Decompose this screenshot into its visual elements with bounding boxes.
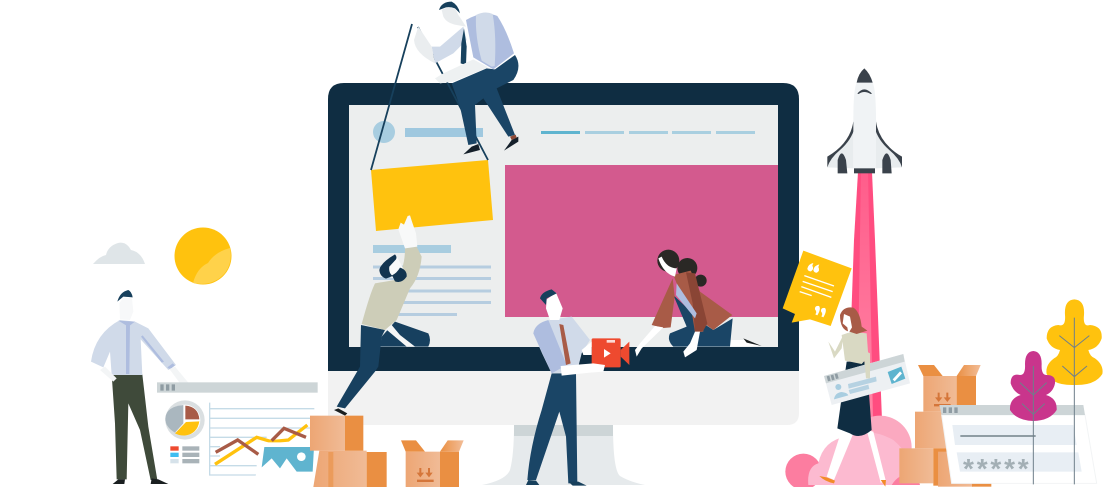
monitor [328,83,799,436]
skirt [837,362,872,436]
hands [100,367,188,383]
lower box [313,451,387,487]
cloud [93,243,145,264]
engine base [854,168,875,173]
upper hand [582,342,592,355]
blouse [842,332,868,364]
opening quote mark [807,263,819,273]
magenta tree [1010,351,1057,484]
man on left with shirt and trousers [91,290,188,484]
shirt shadow [533,320,567,373]
shirt detail [118,321,175,374]
shoes [463,137,518,154]
raised arm and fingers [398,215,417,248]
forearm [435,59,488,83]
website title bar [405,128,483,137]
yellow hanging sign with ropes [371,24,493,231]
jacket shadow [686,272,707,332]
arm over card [864,355,870,378]
stand shadow [514,425,613,436]
right arm [864,350,870,377]
pink clouds [785,416,920,487]
monitor stand [482,425,645,485]
chart legend [170,446,199,463]
hair [540,289,557,305]
shoes [819,476,886,487]
yellow line [215,425,307,464]
photo card [253,442,321,487]
window [857,89,872,94]
white hand [385,325,415,347]
shirt [533,317,590,373]
username field [952,425,1077,445]
face [442,7,466,27]
website navigation [541,131,755,134]
text heading block [373,245,451,253]
panel header [157,382,318,393]
shoe [334,408,347,416]
necktie [559,324,571,365]
rocket [827,68,902,173]
middle box [915,412,948,448]
yellow tree [1046,299,1103,484]
kneeling woman [635,250,762,357]
trousers [112,374,157,480]
website logo [373,121,395,143]
pink hero image block [505,165,778,317]
body text lines [373,266,491,316]
screen [349,105,778,347]
man with camera [526,289,629,486]
left arm [828,335,843,358]
man sitting on monitor [414,2,518,154]
video camera icon [592,338,629,367]
face shade [119,297,133,320]
face [843,314,852,333]
quote lines [800,276,834,297]
face and neck [546,293,563,320]
bearded man reaching up [334,215,430,416]
trousers [452,55,518,145]
nose [857,68,873,83]
legs [827,430,886,483]
monitor chin [328,360,799,425]
trousers [527,373,577,483]
scarf [676,283,697,318]
sock [510,135,517,140]
trousers [669,295,733,347]
shoes [113,478,168,484]
sun [174,228,232,284]
trousers [337,325,385,408]
arms [635,326,700,357]
rear shirt [466,14,514,69]
sleeve [432,27,467,63]
shoes [526,480,587,486]
bottom right box [938,452,991,487]
jacket [673,271,732,332]
pie chart [165,400,205,440]
hair [840,307,867,334]
chart panel [157,382,321,487]
left wing [827,120,853,168]
carried card [824,354,910,405]
hair [117,290,133,302]
hair [439,2,460,13]
wing edges [827,122,902,167]
header dots [943,407,958,413]
monitor frame [328,83,799,371]
beard [392,268,407,282]
chart axes and gridlines [210,403,314,475]
cardboard boxes near bearded man [310,416,464,487]
shirt [91,320,176,375]
bottom left box [899,448,953,486]
open box [918,365,981,412]
upper box [310,416,363,451]
open box [401,440,464,487]
hair [657,250,707,287]
password field [957,452,1082,472]
password asterisks: ***** [963,453,1031,484]
login panel [939,405,1097,483]
username line [960,435,1036,437]
login header [939,405,1085,415]
forearm [561,363,605,376]
bent leg [380,322,430,347]
white foot and shoe [730,340,762,347]
cardboard boxes on right [899,365,991,487]
speech bubble with quote [783,251,852,326]
brown line [216,428,306,454]
necktie [461,28,467,65]
rocket exhaust beam [847,172,882,437]
face [658,257,677,277]
sweater [362,247,422,330]
walking woman [819,307,910,487]
face [387,256,404,279]
hand on rope [414,27,435,63]
right wing [876,120,902,168]
header dots [160,384,175,391]
jacket sleeve [652,278,675,328]
shirt highlight [476,13,495,67]
engine pods [838,153,892,173]
hair [379,254,396,279]
body [853,83,876,168]
closing quote mark [815,306,826,317]
